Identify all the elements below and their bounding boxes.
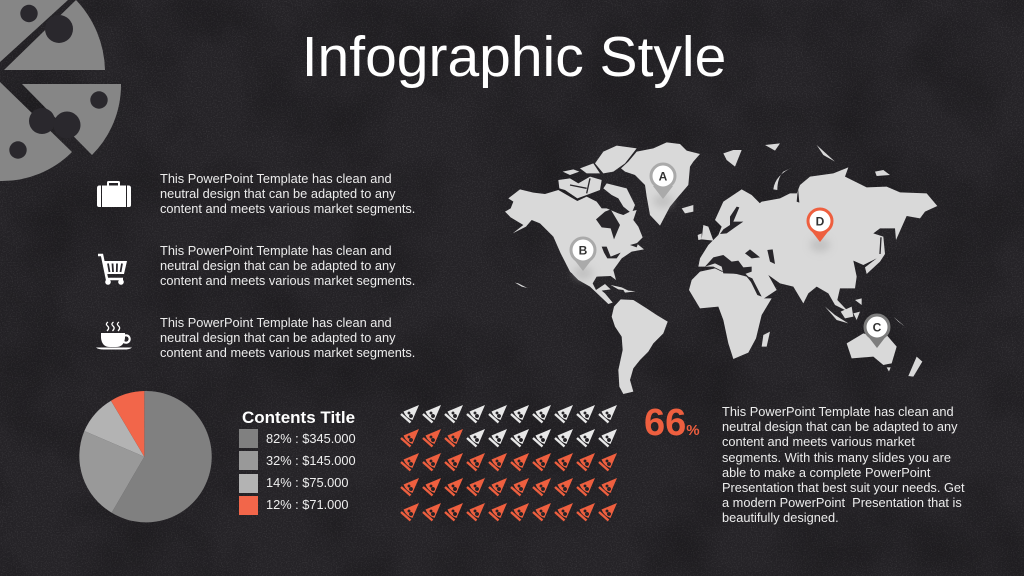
title: Infographic Style — [302, 25, 726, 89]
legend row 3: 14% : $75.000 — [266, 475, 349, 490]
pin A: A — [659, 170, 668, 184]
pie slice 82% — [112, 391, 212, 522]
lakes and bays — [596, 209, 638, 258]
pie slice 32% — [79, 431, 144, 513]
legend title: Contents Title — [242, 408, 355, 427]
pin D: D — [816, 214, 825, 228]
north america — [505, 189, 644, 304]
greenland — [621, 142, 700, 226]
icon: coffee cup — [96, 322, 132, 350]
text block 3: This PowerPoint Template has clean and — [160, 315, 392, 330]
slice: lower left piece — [0, 82, 72, 181]
description paragraph — [722, 404, 965, 525]
indonesia — [825, 298, 905, 327]
text block 3: neutral design that can be adapted to any — [160, 330, 396, 345]
eurasia — [698, 167, 937, 312]
decorative pizza slices — [0, 0, 121, 181]
tasmania and new zealand — [887, 357, 922, 377]
icon: suitcase — [97, 181, 131, 207]
description paragraph: content and meets various market — [722, 434, 915, 449]
icon: shopping cart — [98, 254, 127, 285]
description paragraph: This PowerPoint Template has clean and — [722, 404, 954, 419]
text block 2 — [160, 243, 415, 288]
pin C: C — [873, 320, 882, 334]
legend row 4: 12% : $71.000 — [266, 497, 349, 512]
legend row 4 — [239, 496, 349, 515]
text block 2: content and meets various market segments. — [160, 273, 415, 288]
map: europe asia africa oceania — [689, 143, 937, 377]
legend row 1 — [239, 429, 356, 448]
baja channel — [571, 273, 579, 284]
legend row 2: 32% : $145.000 — [266, 453, 356, 468]
text block 3: content and meets various market segments. — [160, 345, 415, 360]
legend row 2 — [239, 451, 356, 470]
text block 3 — [160, 315, 415, 360]
south america — [612, 299, 668, 394]
map: americas and greenland — [505, 142, 700, 394]
arctic russia islands — [723, 143, 890, 190]
iceland — [682, 205, 693, 213]
caribbean and hawaii — [515, 283, 636, 293]
slice: top right piece — [4, 0, 105, 70]
description paragraph: beautifully designed. — [722, 510, 839, 525]
legend — [239, 408, 356, 515]
text block 1: neutral design that can be adapted to any — [160, 186, 396, 201]
arctic channels — [570, 178, 590, 193]
text block 2: neutral design that can be adapted to any — [160, 258, 396, 273]
description paragraph: a modern PowerPoint Presentation that is — [722, 495, 962, 510]
legend row 3 — [239, 474, 349, 493]
description paragraph: neutral design that can be adapted to any — [722, 419, 958, 434]
africa — [689, 268, 772, 359]
british isles — [698, 225, 713, 241]
inland seas — [705, 187, 799, 297]
pizza holes — [9, 5, 108, 159]
pie slice 14% — [84, 401, 144, 457]
description paragraph: Presentation that best suit your needs. Get — [722, 480, 965, 495]
pin B: B — [579, 244, 588, 258]
sakhalin strait — [880, 237, 881, 254]
slice: lower right piece — [22, 84, 121, 155]
slice: top left piece — [0, 0, 68, 62]
madagascar — [762, 332, 770, 347]
text block 1 — [160, 171, 415, 216]
arctic islands — [558, 146, 637, 213]
legend row 1: 82% : $345.000 — [266, 431, 356, 446]
text block 1: This PowerPoint Template has clean and — [160, 171, 392, 186]
text block 1: content and meets various market segments. — [160, 201, 415, 216]
pie slice 12% — [111, 391, 144, 457]
description paragraph: able to make a complete PowerPoint — [722, 465, 930, 480]
australia — [847, 333, 897, 365]
text block 2: This PowerPoint Template has clean and — [160, 243, 392, 258]
description paragraph: segments. With this many slides you are — [722, 450, 951, 465]
big stat 66%: 66% — [644, 402, 700, 444]
